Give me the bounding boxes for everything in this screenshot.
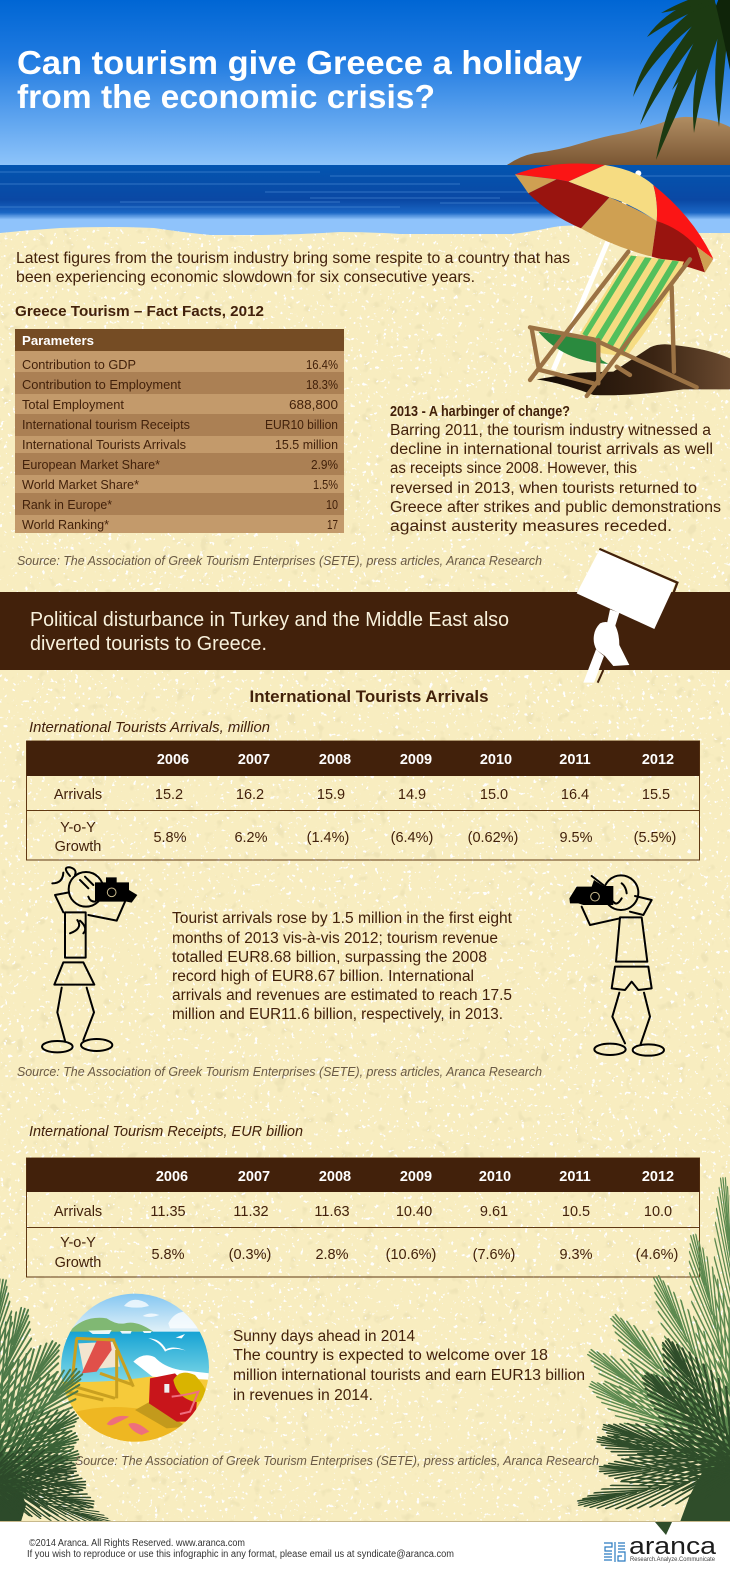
text block: sunny days ahead: The country is expected to welcome over 18 [233,1347,548,1364]
text block: 2013 harbinger of change: 2013 - A harbinger of change? [390,404,570,420]
text block: 2013 harbinger of change: Barring 2011, the tourism industry witnessed a [390,422,711,439]
panel: footer [0,1521,730,1579]
text block: arrivals commentary: months of 2013 vis-à-vis 2012; tourism revenue [172,930,498,947]
source note 1: Source: The Association of Greek Tourism Enterprises (SETE), press articles, Aranca Research [17,553,542,568]
table: tourist arrivals: 2010 [480,752,512,768]
table: tourist arrivals: Arrivals [54,787,102,803]
table caption: receipts: International Tourism Receipts, EUR billion [29,1123,303,1140]
text block: 2013 harbinger of change: reversed in 2013, when tourists returned to [390,480,697,497]
panel: footer: ©2014 Aranca. All Rights Reserved. www.aranca.com [29,1538,245,1549]
intro text: Latest figures from the tourism industry bring some respite to a country that has [16,250,570,267]
table: tourist arrivals: (0.62%) [468,830,518,846]
table: tourism receipts: (0.3%) [229,1247,271,1263]
table: tourism receipts: 11.35 [150,1204,186,1220]
table: tourism receipts: 11.63 [314,1204,350,1220]
panel: parameters table: 688,800 [289,397,338,412]
table: tourist arrivals [26,741,700,860]
table: tourist arrivals: Growth [55,839,101,855]
table: tourism receipts: 5.8% [151,1247,185,1263]
icon: hand holding protest sign [577,549,677,683]
table: tourism receipts: 2.8% [315,1247,349,1263]
title [17,44,583,115]
table: tourist arrivals: 9.5% [559,830,593,846]
panel: parameters table: International tourism Receipts [22,417,190,432]
icon: aranca logo: Research.Analyze.Communicate [630,1557,716,1563]
table: tourism receipts: 2011 [559,1169,591,1185]
table: tourist arrivals: 6.2% [234,830,268,846]
table: tourism receipts: 2009 [400,1169,432,1185]
panel: parameters table: 18.3% [306,377,338,392]
panel: political disturbance banner: Political disturbance in Turkey and the Middle East also [30,609,509,631]
table: tourist arrivals: 2012 [642,752,674,768]
panel: parameters table: Rank in Europe* [22,497,112,512]
panel: parameters table: 16.4% [306,357,338,372]
table: tourism receipts: 10.40 [396,1204,432,1220]
table: tourist arrivals: 5.8% [153,830,187,846]
table: tourism receipts: 10.5 [562,1204,590,1220]
icon: aranca logo: aranca [629,1533,717,1560]
table: tourist arrivals: 15.0 [480,787,508,803]
panel: parameters table: Contribution to Employment [22,377,181,392]
table: tourist arrivals: 2011 [559,752,591,768]
panel: footer: If you wish to reproduce or use this infographic in any format, please email us at syndicate@aranca.com [27,1549,454,1560]
table: tourist arrivals: 15.5 [642,787,670,803]
text block: sunny days ahead: in revenues in 2014. [233,1387,373,1404]
text block: arrivals commentary: Tourist arrivals rose by 1.5 million in the first eight [172,910,513,927]
table: tourism receipts: 2010 [479,1169,511,1185]
text block: arrivals commentary: totalled EUR8.68 billion, surpassing the 2008 [172,949,487,966]
table: tourist arrivals: 15.9 [317,787,345,803]
panel: political disturbance banner [0,592,730,670]
table: tourism receipts: (10.6%) [386,1247,436,1263]
panel: parameters table: Parameters [22,333,94,348]
title: from the economic crisis? [17,78,435,115]
heading: international tourists arrivals: International Tourists Arrivals [250,687,488,706]
intro text [16,250,570,286]
island [507,117,730,165]
table: tourist arrivals: 2007 [238,752,270,768]
panel: parameters table: 1.5% [313,477,338,492]
panel: parameters table: World Market Share* [22,477,139,492]
table: tourist arrivals: (5.5%) [634,830,676,846]
source note 2: Source: The Association of Greek Tourism Enterprises (SETE), press articles, Aranca Research [17,1064,542,1079]
panel: parameters table: EUR10 billion [265,417,338,432]
table: tourism receipts: Y-o-Y [60,1235,96,1251]
sea [0,165,730,235]
table: tourism receipts: 9.3% [559,1247,593,1263]
text block: sunny days ahead [233,1328,585,1404]
table: tourist arrivals: (6.4%) [391,830,433,846]
text block: 2013 harbinger of change: Greece after strikes and public demonstrations [390,499,721,516]
table: tourist arrivals: 2009 [400,752,432,768]
panel: parameters table: 15.5 million [275,437,338,452]
table caption: arrivals: International Tourists Arrivals, million [29,719,270,736]
table: tourism receipts: 2007 [238,1169,270,1185]
panel: parameters table: World Ranking* [22,517,109,532]
table: tourist arrivals: 15.2 [155,787,183,803]
table: tourist arrivals: 14.9 [398,787,426,803]
panel: parameters table: 10 [326,497,338,512]
text block: sunny days ahead: million international tourists and earn EUR13 billion [233,1367,585,1384]
table: tourism receipts: Arrivals [54,1204,102,1220]
table: tourism receipts: (7.6%) [473,1247,515,1263]
table: tourism receipts: 2006 [156,1169,188,1185]
text block: arrivals commentary: record high of EUR8.67 billion. International [172,968,474,985]
icon: palm fronds bottom right [573,1178,730,1524]
text block: arrivals commentary: million and EUR11.6 billion, respectively, in 2013. [172,1006,503,1023]
intro text: been experiencing economic slowdown for six consecutive years. [16,269,475,286]
panel: parameters table: International Tourists Arrivals [22,437,186,452]
table: tourism receipts: 2012 [642,1169,674,1185]
title: Can tourism give Greece a holiday [17,44,583,81]
icon: beach chair shadow, umbrella and deck chair [515,163,730,396]
text block: 2013 harbinger of change: decline in international tourist arrivals as well [390,441,713,458]
text block: 2013 harbinger of change [390,404,721,535]
icon: palm fronds top right [633,0,730,160]
table: tourism receipts: 2008 [319,1169,351,1185]
table: tourism receipts: 11.32 [233,1204,269,1220]
panel: parameters table: Total Employment [22,397,124,412]
table: tourist arrivals: 2008 [319,752,351,768]
panel: parameters table: 2.9% [311,457,338,472]
table: tourism receipts: 10.0 [644,1204,672,1220]
table: tourism receipts [26,1158,700,1277]
heading: fact table: Greece Tourism – Fact Facts, 2012 [15,303,264,320]
icon: boy tourist with camera [569,875,664,1056]
icon: palm fronds bottom left [0,1276,116,1538]
icon: girl tourist with camera [42,867,137,1052]
panel: sky background [0,0,730,165]
table: tourism receipts: (4.6%) [636,1247,678,1263]
panel: political disturbance banner: diverted tourists to Greece. [30,633,267,655]
icon: aranca logo [604,1533,717,1563]
source note 3: Source: The Association of Greek Tourism Enterprises (SETE), press articles, Aranca Research [75,1453,599,1468]
text block: sunny days ahead: Sunny days ahead in 2014 [233,1328,415,1345]
table: tourism receipts: 9.61 [480,1204,508,1220]
text block: arrivals commentary: arrivals and revenues are estimated to reach 17.5 [172,987,512,1004]
panel: parameters table [15,329,344,533]
panel: parameters table: 17 [327,517,338,532]
table: tourist arrivals: 2006 [157,752,189,768]
table: tourist arrivals: 16.2 [236,787,264,803]
table: tourist arrivals: (1.4%) [307,830,349,846]
text block: 2013 harbinger of change: against austerity measures receded. [390,518,672,535]
table: tourism receipts: Growth [55,1255,101,1271]
table: tourist arrivals: 16.4 [561,787,589,803]
table: tourist arrivals: Y-o-Y [60,820,96,836]
text block: arrivals commentary [172,910,513,1023]
panel: parameters table: Contribution to GDP [22,357,136,372]
icon: round beach scene [60,1293,213,1443]
text block: 2013 harbinger of change: as receipts since 2008. However, this [390,460,637,477]
panel: parameters table: European Market Share* [22,457,160,472]
